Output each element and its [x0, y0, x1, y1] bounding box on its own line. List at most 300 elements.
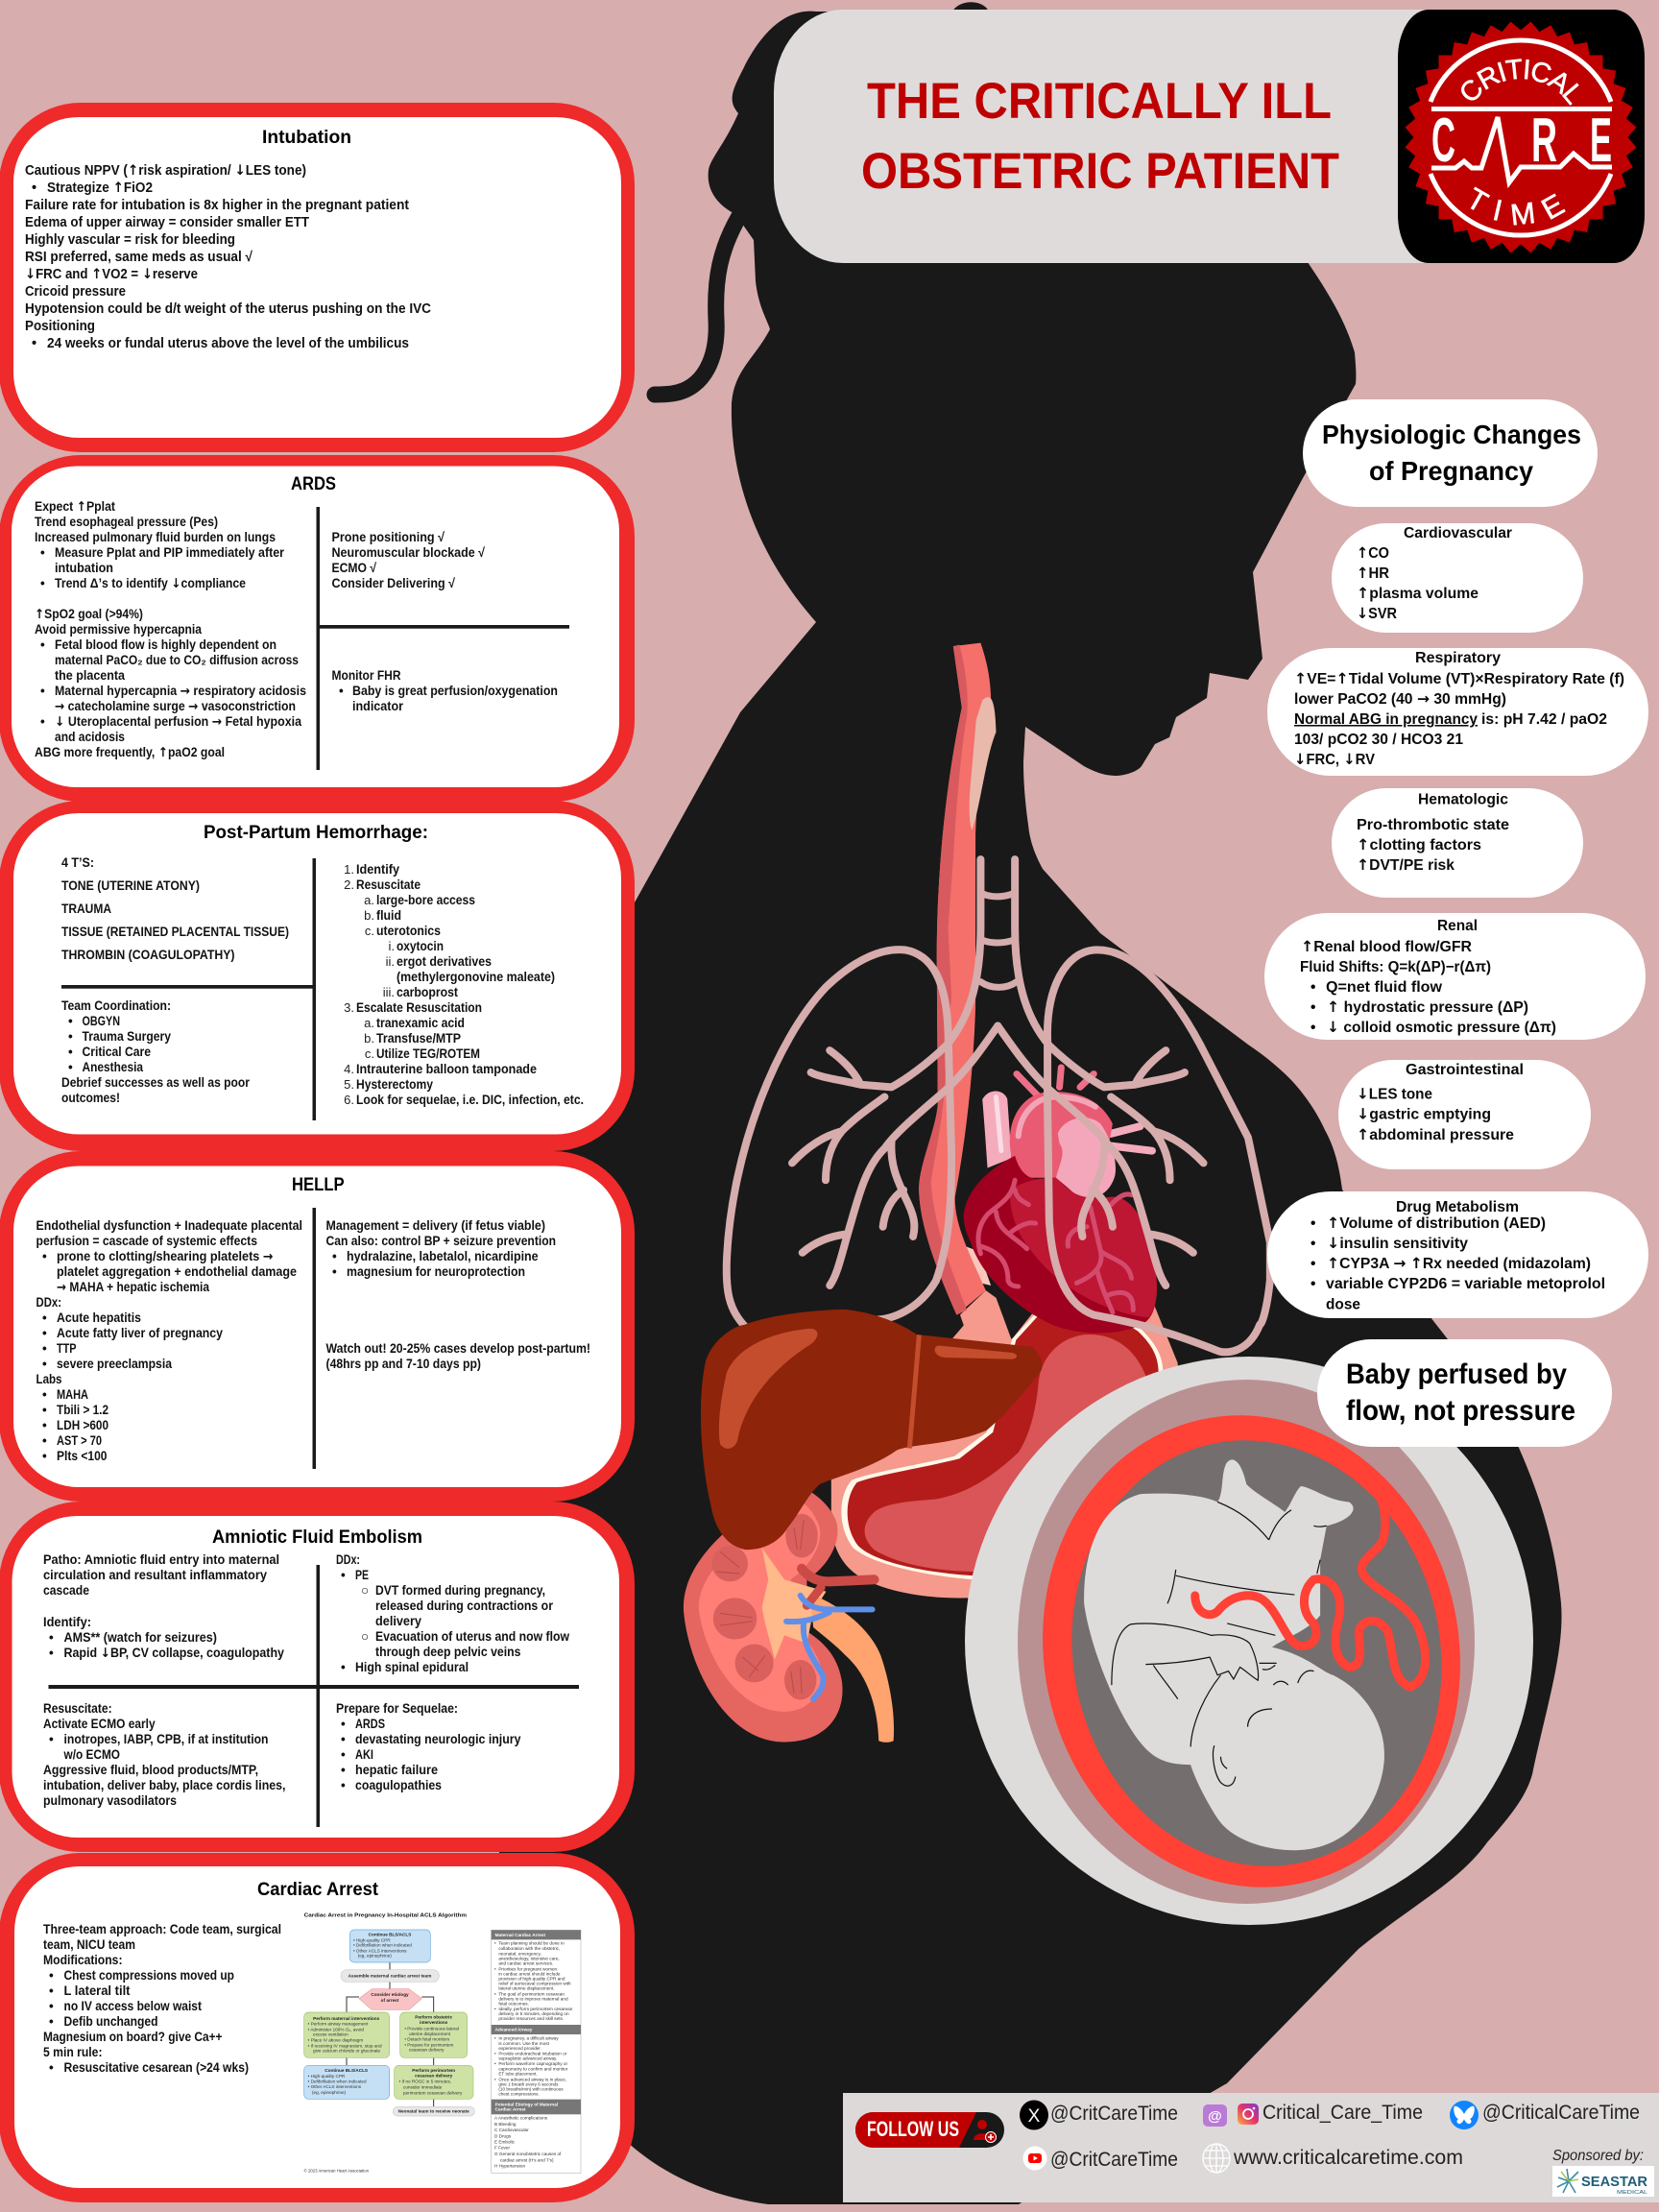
text block: 4 T's: TISSUE (RETAINED PLACENTAL TISSUE)	[61, 925, 289, 939]
text block: ARDS right column: Baby is great perfusion/oxygenation	[352, 684, 558, 698]
text block: ARDS right column: Neuromuscular blockade √	[332, 545, 486, 560]
chart: ACLS algorithm flowchart: excess ventilation	[313, 2032, 349, 2037]
chart: ACLS algorithm flowchart: Assemble maternal cardiac arrest team	[349, 1973, 431, 1978]
text block: DDx: DDx:	[336, 1552, 360, 1567]
text block: intubation notes: Cautious NPPV (↑risk aspiration/ ↓LES tone)	[25, 163, 306, 179]
text block: patho and identify: Rapid ↓BP, CV collapse, coagulopathy	[63, 1646, 284, 1661]
logo: Critical Care Time: CRITICAL	[1461, 59, 1579, 106]
panel: renal	[1264, 913, 1646, 1040]
text block: patho and identify: •	[49, 1646, 54, 1660]
text block: prepare for sequelae: ARDS	[355, 1717, 385, 1731]
text block: team coordination: •	[68, 1029, 73, 1044]
text block: HELLP right column: hydralazine, labetalol, nicardipine	[347, 1249, 539, 1263]
text block: PPH management steps: 6.	[344, 1093, 354, 1107]
text block: PPH management steps: 1.	[344, 862, 354, 877]
panel: drug metabolism: •	[1310, 1236, 1315, 1252]
chart: ACLS algorithm flowchart: Ideally, perform perimortem cesarean	[498, 2007, 573, 2011]
text block: team coordination: •	[68, 1060, 73, 1074]
chart: ACLS algorithm flowchart: cardiac arrest (H's and T's)	[500, 2157, 554, 2162]
text block: DDx: ○	[361, 1629, 369, 1644]
panel: respiratory: Normal ABG in pregnancy	[1294, 711, 1478, 728]
chart: ACLS algorithm flowchart: • Place IV above diaphragm	[308, 2038, 363, 2043]
text block: HELLP left column: → MAHA + hepatic ischemia	[57, 1280, 209, 1295]
text block: HELLP left column: Endothelial dysfunction + Inadequate placental	[36, 1218, 302, 1233]
text block: ARDS left column: Measure Pplat and PIP immediately after	[55, 545, 285, 560]
text block: team coordination: outcomes!	[61, 1091, 120, 1105]
stomach	[831, 1289, 1180, 1598]
text block: HELLP left column: Acute hepatitis	[57, 1310, 141, 1325]
text block: team coordination	[61, 998, 251, 1105]
text block: PPH management steps: Identify	[356, 862, 399, 877]
text block: intubation notes: •	[32, 180, 36, 196]
text block: prepare for sequelae: •	[341, 1732, 346, 1746]
logo: Critical Care Time: C	[1431, 105, 1455, 175]
text block: PPH management steps: 5.	[344, 1077, 354, 1092]
text block: ARDS left column: Expect ↑Pplat	[35, 499, 115, 515]
chart: ACLS algorithm flowchart: of arrest	[381, 1998, 399, 2003]
text block: resuscitate: •	[49, 1732, 54, 1746]
chart: ACLS algorithm flowchart: cesarean delivery	[409, 2048, 445, 2053]
text block: PPH management steps	[344, 862, 584, 1107]
panel: renal: •	[1310, 1020, 1315, 1036]
text block: HELLP left column: severe preeclampsia	[57, 1357, 172, 1371]
text block: ARDS left column: •	[40, 637, 45, 652]
text block: prepare for sequelae: hepatic failure	[355, 1763, 438, 1777]
chart: ACLS algorithm flowchart: is common. Use the most	[498, 2041, 550, 2046]
text block: ARDS right column: ECMO √	[332, 561, 377, 575]
text block: HELLP right column: Can also: control BP + seizure prevention	[326, 1234, 556, 1248]
chart: ACLS algorithm flowchart: Cardiac Arrest	[495, 2107, 526, 2112]
text block: PPH management steps: 2.	[344, 878, 354, 892]
chart: ACLS algorithm flowchart: provision of high-quality CPR and	[498, 1977, 565, 1982]
text block: PPH management steps: i.	[388, 939, 395, 953]
panel: cardiovascular: ↑plasma volume	[1357, 585, 1479, 602]
text block: resuscitate: inotropes, IABP, CPB, if at institution	[63, 1732, 269, 1746]
chart: ACLS algorithm flowchart: chest compressions.	[498, 2092, 540, 2097]
panel: renal: •	[1310, 999, 1315, 1016]
chart: ACLS algorithm flowchart: • Defibrillation when indicated	[353, 1943, 412, 1948]
panel: cardiovascular	[1332, 523, 1583, 633]
text block: PPH management steps: 4.	[344, 1062, 354, 1076]
text block: HELLP left column: platelet aggregation + endothelial damage	[57, 1264, 297, 1279]
text block: prepare for sequelae: Prepare for Sequelae:	[336, 1701, 458, 1716]
icon: threads	[1203, 2104, 1227, 2127]
chart: ACLS algorithm flowchart: Once advanced airway is in place,	[498, 2077, 566, 2081]
heading: post-partum hemorrhage: Post-Partum Hemorrhage:	[204, 823, 428, 843]
panel: cardiovascular: Cardiovascular	[1404, 525, 1512, 541]
text block: DDx: DVT formed during pregnancy,	[375, 1583, 545, 1598]
text block: HELLP left column: •	[42, 1326, 47, 1340]
chart: ACLS algorithm flowchart: collaboration with the obstetric,	[498, 1946, 560, 1951]
panel: physiologic changes heading: of Pregnancy	[1369, 456, 1533, 486]
panel: cardiovascular: ↑HR	[1357, 565, 1389, 582]
chart: ACLS algorithm flowchart: •	[494, 2007, 496, 2011]
chart: ACLS algorithm flowchart: • If receiving IV magnesium, stop and	[308, 2043, 382, 2048]
chart: ACLS algorithm flowchart: Potential Etiology of Maternal	[495, 2102, 558, 2106]
text block: PPH management steps: c.	[365, 924, 374, 938]
text block: cardiac arrest notes: •	[49, 2014, 54, 2029]
panel: drug metabolism: ↑Volume of distribution (AED)	[1327, 1214, 1546, 1232]
panel: drug metabolism: ↓insulin sensitivity	[1327, 1235, 1468, 1252]
text block: HELLP left column: •	[42, 1387, 47, 1402]
text block: HELLP left column: •	[42, 1249, 47, 1263]
text block: resuscitate: Activate ECMO early	[43, 1717, 156, 1731]
panel: hematologic: ↑clotting factors	[1357, 836, 1481, 854]
text block: PPH management steps: Intrauterine balloon tamponade	[356, 1062, 537, 1076]
text block: cardiac arrest notes	[43, 1922, 281, 2075]
chart: ACLS algorithm flowchart: Continue BLS/ACLS	[325, 2068, 368, 2073]
text block: PPH management steps: ii.	[386, 954, 395, 969]
text block: PPH management steps: Resuscitate	[356, 878, 421, 892]
heart	[964, 1068, 1157, 1334]
text block: intubation notes: Hypotension could be d/t weight of the uterus pushing on the IVC	[25, 301, 431, 317]
chart: ACLS algorithm flowchart: •	[494, 1991, 496, 1996]
text block: DDx: PE	[355, 1568, 369, 1582]
chart: ACLS algorithm flowchart: relief of aortocaval compression with	[498, 1982, 571, 1986]
chart: ACLS algorithm flowchart: A Anesthetic complications	[494, 2116, 548, 2121]
text block: PPH management steps: b.	[364, 908, 374, 923]
text block: 4 T's: 4 T’S:	[61, 855, 94, 870]
chart: ACLS algorithm flowchart: • If no ROSC in 5 minutes,	[399, 2080, 451, 2084]
panel: drug metabolism: •	[1310, 1215, 1315, 1232]
text block: ARDS left column: → catecholamine surge → vasoconstriction	[55, 699, 296, 714]
text block: PPH management steps: b.	[364, 1031, 374, 1046]
chart: ACLS algorithm flowchart: • Defibrillation when indicated	[308, 2079, 367, 2083]
text block: cardiac arrest notes: •	[49, 1999, 54, 2013]
text block: ARDS right column: Prone positioning √	[332, 530, 445, 544]
text block: PPH management steps: large-bore access	[376, 893, 475, 907]
text block: team coordination: Anesthesia	[83, 1060, 143, 1074]
text block: PPH management steps: fluid	[376, 908, 401, 923]
icon: X	[1020, 2101, 1048, 2129]
chart: ACLS algorithm flowchart: (eg, epinephrine)	[358, 1954, 392, 1959]
text block: patho and identify: •	[49, 1630, 54, 1645]
panel: drug metabolism: dose	[1326, 1296, 1360, 1313]
text block: HELLP right column: magnesium for neuroprotection	[347, 1264, 525, 1279]
chart: ACLS algorithm flowchart: C Cardiovascular	[494, 2128, 529, 2132]
text block: DDx: High spinal epidural	[355, 1660, 469, 1674]
panel: hematologic	[1332, 788, 1583, 898]
text block: PPH management steps: oxytocin	[397, 939, 444, 953]
text block: ARDS left column	[35, 499, 306, 760]
chart: ACLS algorithm flowchart: Continue BLS/ACLS	[369, 1933, 411, 1937]
chart: ACLS algorithm flowchart: Perform maternal interventions	[313, 2016, 380, 2021]
chart: ACLS algorithm flowchart: The goal of perimortem cesarean	[498, 1991, 565, 1996]
panel: hematologic: Pro-thrombotic state	[1357, 817, 1509, 833]
chart: ACLS algorithm flowchart: give calcium chloride or gluconate	[313, 2049, 381, 2054]
text block: HELLP left column: Labs	[36, 1372, 61, 1386]
text block: DDx	[336, 1552, 569, 1674]
chart: ACLS algorithm flowchart: • Prepare for perimortem	[404, 2043, 454, 2048]
panel: renal: ↑ hydrostatic pressure (ΔP)	[1327, 998, 1528, 1016]
sponsor: SEASTAR	[1581, 2174, 1647, 2190]
text block: cardiac arrest notes: •	[49, 2060, 54, 2075]
logo: Critical Care Time: R	[1531, 105, 1557, 175]
chart: ACLS algorithm flowchart: supraglottic advanced airway.	[498, 2056, 557, 2061]
chart: ACLS algorithm flowchart: • Detach fetal monitors	[404, 2037, 450, 2042]
chart: ACLS algorithm flowchart: Perform obstetric	[415, 2015, 452, 2020]
panel: ARDS	[0, 455, 635, 802]
callout: baby perfused by flow: Baby perfused by	[1346, 1358, 1567, 1390]
text block: cardiac arrest notes: L lateral tilt	[63, 1984, 131, 1998]
text block: PPH management steps: Transfuse/MTP	[376, 1031, 461, 1046]
text block: ARDS left column: •	[40, 545, 45, 560]
text block: ARDS left column: Trend esophageal pressure (Pes)	[35, 515, 218, 529]
chart: ACLS algorithm flowchart: B Bleeding	[494, 2122, 517, 2127]
panel: renal: Fluid Shifts: Q=k(ΔP)−r(Δπ)	[1300, 959, 1491, 975]
callout: baby perfused by flow	[1317, 1339, 1612, 1447]
panel: gastrointestinal: ↓gastric emptying	[1357, 1106, 1491, 1123]
text block: patho and identify: Identify:	[43, 1615, 91, 1629]
womb and fetus	[965, 1357, 1533, 1927]
chart: ACLS algorithm flowchart: fetal outcomes.	[498, 2002, 529, 2007]
text block: HELLP left column: Plts <100	[57, 1449, 108, 1463]
text block: cardiac arrest notes: •	[49, 1968, 54, 1983]
text block: HELLP left column: DDx:	[36, 1295, 61, 1310]
panel: gastrointestinal: Gastrointestinal	[1406, 1062, 1524, 1078]
chart: ACLS algorithm flowchart: Maternal Cardiac Arrest	[495, 1933, 545, 1937]
text block: PPH management steps: a.	[364, 1016, 374, 1030]
chart: ACLS algorithm flowchart: H Hypertension	[494, 2163, 525, 2168]
chart: ACLS algorithm flowchart: • Other ACLS interventions	[308, 2084, 362, 2089]
text block: PPH management steps: Utilize TEG/ROTEM	[376, 1046, 480, 1061]
text block: PPH management steps: c.	[365, 1046, 374, 1061]
panel: respiratory: is: pH 7.42 / paO2	[1481, 711, 1607, 728]
text block: DDx: •	[341, 1568, 346, 1582]
chart: ACLS algorithm flowchart: in cardiac arrest should include	[498, 1971, 561, 1976]
heading: cardiac arrest: Cardiac Arrest	[257, 1880, 379, 1900]
chart: ACLS algorithm flowchart: cesarean delivery	[415, 2073, 453, 2078]
text block: PPH management steps: Hysterectomy	[356, 1077, 433, 1092]
text block: cardiac arrest notes: Chest compressions moved up	[63, 1968, 234, 1983]
text block: intubation notes: Strategize ↑FiO2	[47, 180, 153, 196]
panel: respiratory: Respiratory	[1415, 650, 1501, 666]
panel: respiratory: 103/ pCO2 30 / HCO3 21	[1294, 732, 1463, 748]
text block: resuscitate: w/o ECMO	[63, 1747, 120, 1762]
logo: Critical Care Time	[1398, 10, 1645, 263]
text block: resuscitate	[43, 1701, 286, 1808]
title text: THE CRITICALLY ILL	[867, 73, 1332, 130]
text block: PPH management steps: (methylergonovine maleate)	[397, 970, 555, 984]
text block: PPH management steps: carboprost	[397, 985, 458, 999]
text block: ARDS left column: ↓ Uteroplacental perfusion → Fetal hypoxia	[55, 714, 301, 730]
chart: ACLS algorithm flowchart: Team planning should be done in	[498, 1941, 565, 1946]
text block: cardiac arrest notes: no IV access below waist	[63, 1999, 202, 2013]
text block: HELLP right column: (48hrs pp and 7-10 days pp)	[326, 1357, 481, 1371]
text block: HELLP left column: •	[42, 1341, 47, 1356]
chart: ACLS algorithm flowchart: D Drugs	[494, 2133, 512, 2138]
chart: ACLS algorithm flowchart: Perform waveform capnography or	[498, 2061, 567, 2066]
text block: DDx: ○	[361, 1583, 369, 1598]
panel: social footer	[843, 2093, 1659, 2202]
logo: Critical Care Time: E	[1590, 105, 1612, 175]
text block: ARDS right column: indicator	[352, 699, 404, 713]
text block: HELLP left column: prone to clotting/shearing platelets →	[57, 1249, 273, 1264]
text block: PPH management steps: 3.	[344, 1000, 354, 1015]
text block: team coordination: Debrief successes as well as poor	[61, 1075, 251, 1090]
sponsor: Sponsored by:	[1552, 2148, 1644, 2164]
chart: ACLS algorithm flowchart: and cardiac arrest services.	[498, 1961, 553, 1966]
panel: gastrointestinal: ↓LES tone	[1357, 1085, 1432, 1102]
text block: DDx: •	[341, 1660, 346, 1674]
chart: ACLS algorithm flowchart: •	[494, 2036, 496, 2041]
text block: ARDS right column: Monitor FHR	[332, 668, 401, 683]
text block: ARDS left column: maternal PaCO₂ due to CO₂ diffusion across	[55, 653, 299, 667]
text block: resuscitate: pulmonary vasodilators	[43, 1793, 177, 1808]
text block: DDx: released during contractions or	[375, 1599, 554, 1613]
text block: HELLP left column: •	[42, 1418, 47, 1432]
chart: ACLS algorithm flowchart: perimortem cesarean delivery	[403, 2090, 463, 2095]
text block: HELLP left column: •	[42, 1357, 47, 1371]
text block: intubation notes: Highly vascular = risk for bleeding	[25, 232, 235, 248]
chart: ACLS algorithm flowchart: delivery in 5 minutes, depending on	[498, 2011, 569, 2016]
text block: intubation notes: Edema of upper airway = consider smaller ETT	[25, 215, 309, 230]
text block: DDx: delivery	[375, 1614, 421, 1628]
text block: team coordination: Team Coordination:	[61, 998, 171, 1013]
text block: prepare for sequelae: •	[341, 1763, 346, 1777]
panel: hematologic: Hematologic	[1418, 791, 1508, 808]
text block: HELLP left column: MAHA	[57, 1387, 88, 1402]
text block: ARDS right column	[332, 530, 558, 713]
text block: ARDS left column: Maternal hypercapnia → respiratory acidosis	[55, 684, 306, 699]
text block: team coordination: Critical Care	[83, 1045, 151, 1059]
text block: PPH management steps: uterotonics	[376, 924, 441, 938]
text block: ARDS left column: •	[40, 684, 45, 698]
title banner	[774, 10, 1638, 263]
panel: drug metabolism: •	[1310, 1256, 1315, 1272]
chart: ACLS algorithm flowchart: (10 breaths/min) with continuous	[498, 2087, 564, 2092]
panel: cardiac arrest	[0, 1853, 635, 2202]
text block: PPH management steps: Look for sequelae, i.e. DIC, infection, etc.	[356, 1093, 584, 1107]
text block: ARDS left column: •	[40, 576, 45, 590]
panel: post-partum hemorrhage	[0, 801, 635, 1151]
follow us badge	[855, 2112, 1004, 2148]
icon: youtube	[1023, 2147, 1046, 2170]
text block: cardiac arrest notes: Magnesium on board? give Ca++	[43, 2030, 223, 2044]
text block: ARDS left column: •	[40, 714, 45, 729]
chart: ACLS algorithm flowchart: capnometry to confirm and monitor	[498, 2066, 568, 2071]
text block: HELLP right column: •	[332, 1264, 337, 1279]
panel: respiratory: ↓FRC, ↓RV	[1294, 751, 1376, 768]
icon: bluesky	[1450, 2101, 1479, 2129]
text block: HELLP left column: Acute fatty liver of pregnancy	[57, 1326, 223, 1340]
chart: ACLS algorithm flowchart: experienced provider.	[498, 2046, 541, 2051]
chart: ACLS algorithm flowchart: © 2023 American Heart Association	[304, 2167, 369, 2173]
sponsor: MEDICAL	[1617, 2190, 1647, 2196]
text block: ARDS left column: Trend Δ’s to identify ↓compliance	[55, 576, 246, 591]
text block: team coordination: •	[68, 1045, 73, 1059]
chart: ACLS algorithm flowchart: •	[494, 2061, 496, 2066]
text block: ARDS left column: Increased pulmonary fluid burden on lungs	[35, 530, 276, 544]
kidney	[684, 1488, 894, 1743]
panel: hematologic: ↑DVT/PE risk	[1357, 856, 1455, 874]
handle: instagram: Critical_Care_Time	[1262, 2102, 1423, 2124]
follow us badge: FOLLOW US	[867, 2117, 959, 2141]
text block: intubation notes: •	[32, 336, 36, 351]
chart: ACLS algorithm flowchart: interventions	[420, 2020, 448, 2025]
text block: intubation notes: RSI preferred, same meds as usual √	[25, 250, 252, 265]
text block: intubation notes: ↓FRC and ↑VO2 = ↓reserve	[25, 267, 198, 282]
text block: prepare for sequelae: •	[341, 1717, 346, 1731]
text block: team coordination: •	[68, 1014, 73, 1028]
heading: amniotic fluid embolism: Amniotic Fluid Embolism	[212, 1527, 422, 1548]
text block: intubation notes: Cricoid pressure	[25, 284, 126, 300]
text block: 4 T's: TRAUMA	[61, 902, 111, 916]
text block: 4 T's: TONE (UTERINE ATONY)	[61, 878, 200, 893]
text block: HELLP left column: •	[42, 1433, 47, 1448]
chart: ACLS algorithm flowchart	[304, 1913, 581, 2173]
text block: HELLP right column: •	[332, 1249, 337, 1263]
text block: HELLP left column: AST > 70	[57, 1433, 102, 1448]
text block: cardiac arrest notes: Defib unchanged	[63, 2014, 157, 2029]
panel: renal: Q=net fluid flow	[1326, 979, 1443, 996]
text block: ARDS left column: and acidosis	[55, 730, 125, 744]
liver	[701, 1310, 1043, 1550]
heading: ARDS: ARDS	[291, 474, 336, 494]
text block: prepare for sequelae: •	[341, 1747, 346, 1762]
handle: youtube: @CritCareTime	[1050, 2149, 1178, 2171]
panel: cardiovascular: ↓SVR	[1357, 605, 1397, 622]
chart: ACLS algorithm flowchart: •	[494, 1941, 496, 1946]
text block: intubation notes: Failure rate for intubation is 8x higher in the pregnant patient	[25, 198, 409, 213]
panel: gastrointestinal	[1338, 1060, 1591, 1169]
panel: cardiovascular: ↑CO	[1357, 544, 1389, 562]
text block: HELLP left column: •	[42, 1449, 47, 1463]
chart: ACLS algorithm flowchart: Neonatal team to receive neonate	[398, 2109, 469, 2114]
panel: renal: Renal	[1437, 918, 1478, 934]
text block: DDx: through deep pelvic veins	[375, 1645, 520, 1659]
chart: ACLS algorithm flowchart: anesthesiology, intensive care,	[498, 1957, 560, 1961]
callout: baby perfused by flow: flow, not pressure	[1346, 1395, 1575, 1427]
sponsor	[1552, 2148, 1654, 2197]
text block: HELLP left column: LDH >600	[57, 1418, 108, 1432]
text block: prepare for sequelae	[336, 1701, 521, 1792]
text block: team coordination: Trauma Surgery	[83, 1029, 171, 1044]
text block: intubation notes: Positioning	[25, 319, 95, 334]
text block: ARDS left column: intubation	[55, 561, 113, 575]
website: www.criticalcaretime.com	[1233, 2147, 1463, 2169]
chart: ACLS algorithm flowchart: • Administer 100% O₂, avoid	[308, 2027, 364, 2032]
fetus	[1084, 1459, 1426, 1850]
text block: HELLP left column: TTP	[57, 1341, 77, 1356]
text block: patho and identify	[43, 1552, 284, 1661]
chart: ACLS algorithm flowchart: • Provide continuous lateral	[404, 2026, 459, 2031]
chart: ACLS algorithm flowchart: Advanced Airway	[495, 2028, 533, 2032]
text block: prepare for sequelae: devastating neurologic injury	[355, 1732, 521, 1746]
handle: bluesky: @CriticalCareTime	[1482, 2102, 1640, 2124]
text block: prepare for sequelae: coagulopathies	[355, 1778, 442, 1792]
text block: ARDS left column: ↑SpO2 goal (>94%)	[35, 607, 143, 622]
panel: renal: •	[1310, 979, 1315, 996]
text block: ARDS left column: Avoid permissive hypercapnia	[35, 622, 202, 637]
panel: amniotic fluid embolism	[0, 1502, 635, 1852]
chart: ACLS algorithm flowchart: G General nonobstetric causes of	[494, 2152, 562, 2156]
text block: HELLP left column	[36, 1218, 302, 1463]
text block: ARDS right column: •	[339, 684, 344, 698]
text block: resuscitate: Aggressive fluid, blood products/MTP,	[43, 1763, 258, 1777]
maternal silhouette	[491, 2, 1562, 2204]
chart: ACLS algorithm flowchart: Provide endotracheal intubation or	[498, 2052, 567, 2056]
icon: threads: @	[1208, 2108, 1222, 2125]
chart: ACLS algorithm flowchart: Cardiac Arrest in Pregnancy In-Hospital ACLS Algorithm	[304, 1913, 467, 1919]
umbilical cord	[1195, 1492, 1426, 1687]
text block: PPH management steps: iii.	[383, 985, 395, 999]
handle: X: @CritCareTime	[1050, 2103, 1178, 2125]
panel: respiratory: lower PaCO2 (40 → 30 mmHg)	[1294, 690, 1506, 708]
text block: ARDS left column: ABG more frequently, ↑paO2 goal	[35, 745, 225, 760]
text block: 4 T's: THROMBIN (COAGULOPATHY)	[61, 948, 234, 962]
panel: respiratory: ↑VE=↑Tidal Volume (VT)×Respiratory Rate (f)	[1294, 670, 1624, 687]
